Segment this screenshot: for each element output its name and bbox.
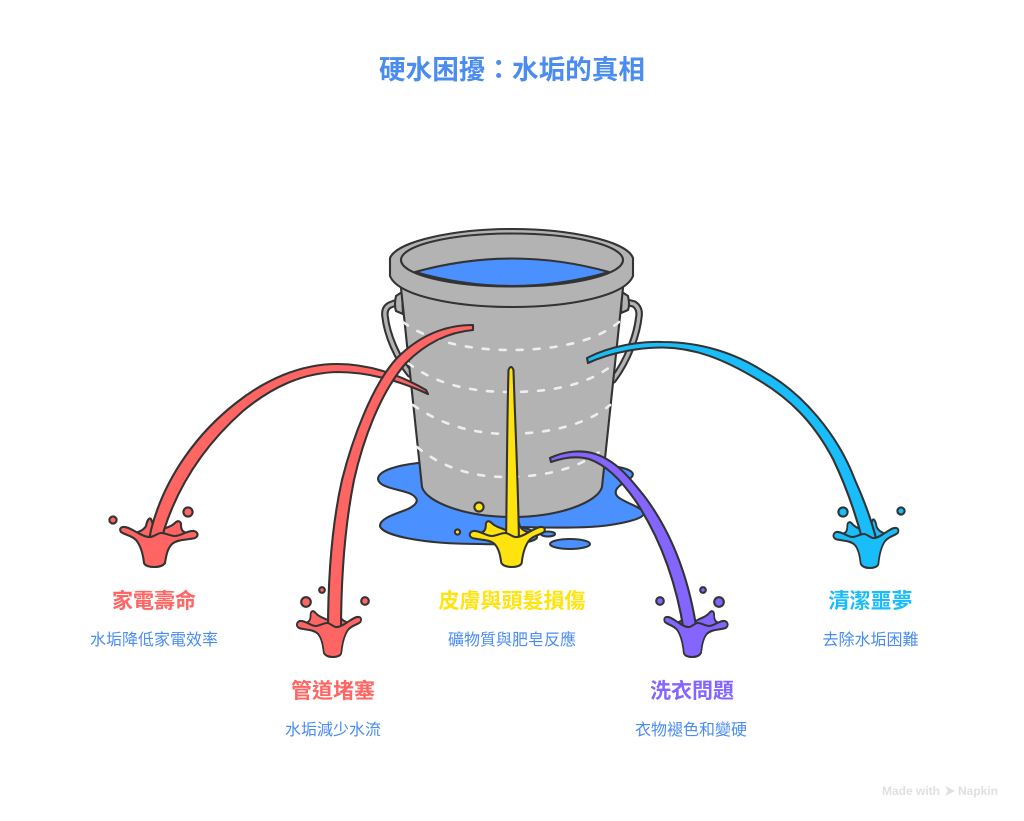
label: pipe clogging [285, 679, 381, 739]
splash back lobes [306, 608, 348, 630]
watermark: Made with [882, 784, 940, 798]
splash back lobes [842, 519, 885, 541]
bucket opening [401, 234, 623, 286]
bucket [385, 229, 639, 517]
splash front [664, 617, 728, 657]
splash back lobes [136, 518, 187, 540]
left handle [385, 302, 410, 374]
label: skin and hair damage: 礦物質與肥皂反應 [448, 630, 576, 649]
droplets [838, 507, 905, 517]
droplets [109, 507, 193, 524]
watermark [882, 784, 998, 798]
label: cleaning nightmare: 清潔噩夢 [828, 590, 912, 613]
label: appliance lifespan: 家電壽命 [112, 589, 196, 613]
label: laundry problems: 衣物褪色和變硬 [635, 721, 747, 739]
stream [506, 367, 519, 542]
stream [550, 451, 697, 632]
label: appliance lifespan [90, 589, 218, 649]
splash back lobes [480, 518, 529, 540]
bucket rim [390, 229, 633, 307]
dashed water level lines [403, 322, 619, 477]
splash stream: laundry [550, 451, 728, 657]
label: laundry problems [635, 679, 747, 739]
splash stream: cleaning [587, 342, 905, 568]
label: cleaning nightmare [822, 590, 919, 649]
droplets [455, 502, 484, 535]
title: 硬水困擾：水垢的真相 [379, 55, 645, 85]
label: skin and hair damage [438, 590, 586, 649]
splash stream: pipe clogging [297, 325, 473, 657]
label: appliance lifespan: 水垢降低家電效率 [90, 631, 218, 649]
puddle under bucket [378, 463, 644, 549]
label: skin and hair damage: 皮膚與頭髮損傷 [438, 590, 586, 613]
water surface [415, 258, 609, 286]
splash front [470, 527, 545, 567]
label: pipe clogging: 管道堵塞 [291, 679, 375, 703]
splash back lobes [677, 608, 719, 630]
stream [328, 325, 473, 632]
stream [587, 342, 877, 542]
splash front [833, 528, 898, 568]
right handle [613, 302, 639, 380]
splash stream: skin and hair [455, 367, 545, 567]
droplets [301, 587, 369, 607]
splash stream: appliance lifespan [109, 364, 428, 567]
stream [149, 364, 428, 541]
bucket body [401, 288, 623, 517]
watermark: Napkin [958, 784, 998, 798]
droplets [656, 587, 724, 607]
splash front [297, 617, 361, 657]
label: laundry problems: 洗衣問題 [650, 679, 734, 703]
label: pipe clogging: 水垢減少水流 [285, 721, 381, 739]
splash front [120, 527, 198, 567]
handle ears [395, 292, 629, 314]
label: cleaning nightmare: 去除水垢困難 [822, 631, 919, 649]
